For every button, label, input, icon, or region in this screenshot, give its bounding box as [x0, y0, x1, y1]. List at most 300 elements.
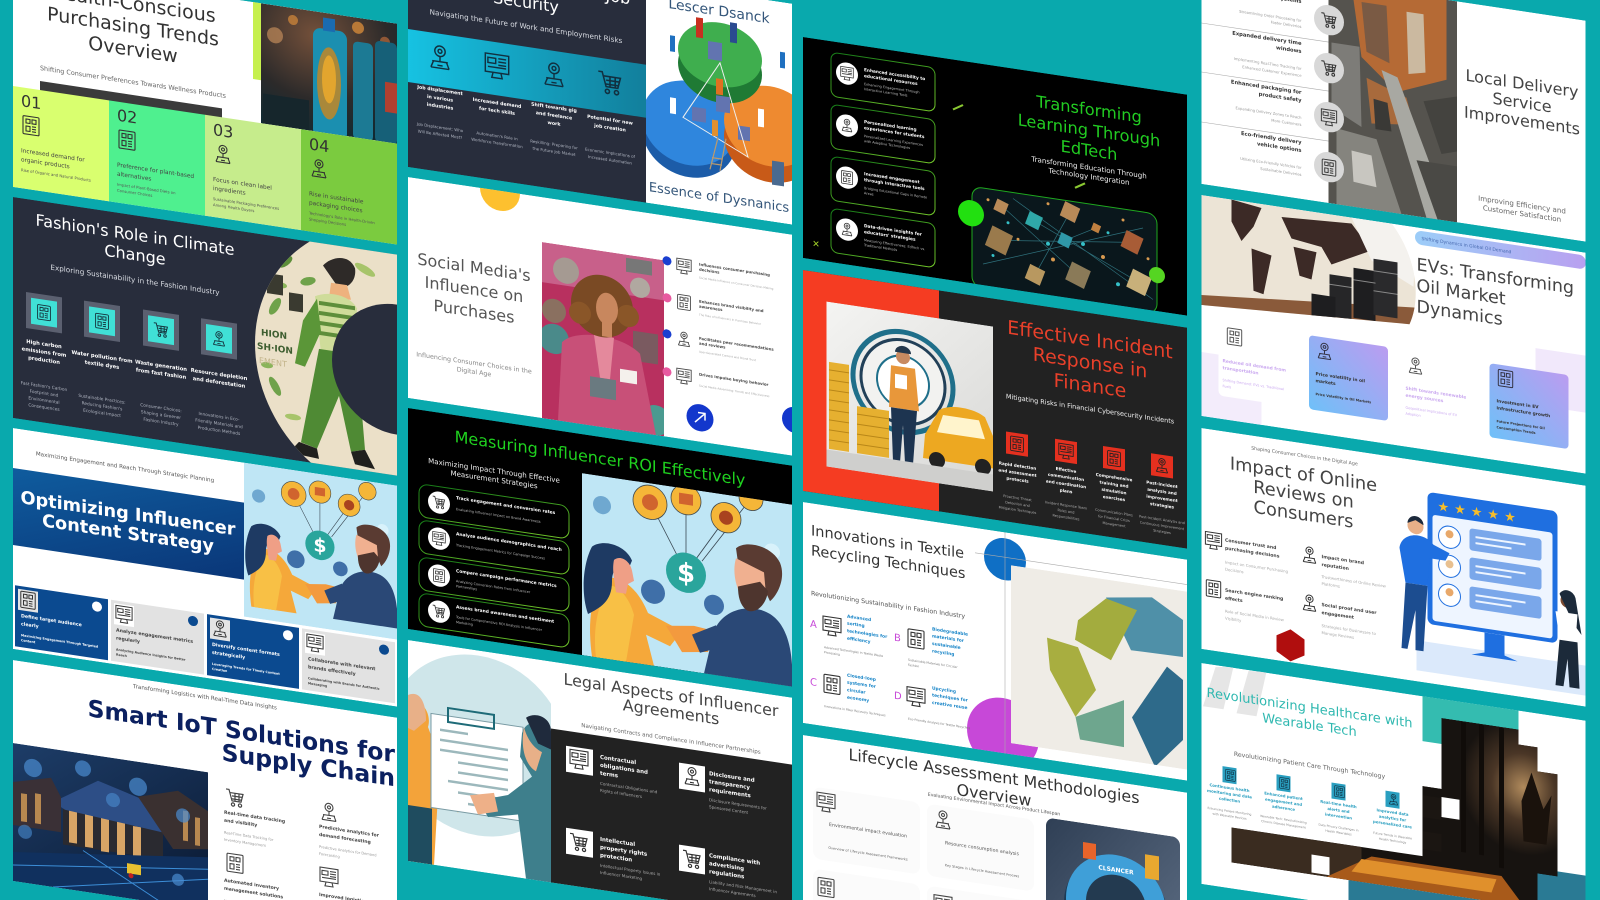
item 2: Forecasting — [319, 852, 340, 859]
item 2: plans — [1060, 488, 1073, 494]
row 2 — [419, 520, 569, 575]
item 1: terms — [600, 771, 619, 780]
item 3: property rights — [600, 845, 648, 858]
item 1 — [566, 746, 658, 801]
row 1: educational resources — [864, 73, 918, 87]
card 02: Consumer Choices — [117, 188, 152, 198]
item 1: Contractual — [600, 755, 636, 766]
item B: B — [894, 633, 901, 645]
card 04 — [301, 129, 397, 245]
card 04: Rise in sustainable — [309, 191, 364, 206]
quote marks — [1203, 662, 1266, 718]
row 1: Enhanced accessibility to — [864, 67, 925, 82]
card 1: transportation — [1222, 365, 1259, 377]
title banner: Optimizing Influencer — [20, 487, 236, 540]
row 1 — [419, 484, 569, 539]
item 1: with Wearable Devices — [1212, 812, 1247, 821]
card 1: Fuels — [1222, 384, 1231, 389]
row 3: Analyzing Conversion Rates from Influencer — [456, 579, 531, 594]
row 4 — [419, 593, 569, 648]
item 4: analysis and — [1147, 487, 1177, 496]
item C: Closed-loop — [847, 673, 876, 683]
item 2: adherence — [1272, 804, 1295, 812]
item 4: regulations — [709, 869, 745, 881]
card 4: Collaborating with Brands for Authentic — [308, 676, 380, 691]
icon band — [408, 29, 646, 118]
title: EdTech — [1061, 137, 1117, 164]
title: Change — [104, 241, 166, 269]
title: Local Delivery — [1466, 66, 1579, 102]
pill label — [1415, 230, 1586, 270]
item 1: purchasing decisions — [1225, 546, 1280, 560]
item 3 — [530, 101, 578, 158]
row 2: Analyze audience demographics and reach — [456, 531, 562, 553]
icon circle 3 — [1314, 100, 1344, 134]
item 3: protection — [600, 853, 632, 864]
subtitle: Customer Satisfaction — [1483, 203, 1561, 224]
item 2: transparency — [709, 779, 750, 791]
item B: Fashion — [908, 663, 919, 668]
title: Overview — [88, 31, 178, 68]
item 3: alerts and — [1327, 806, 1350, 814]
item 1: Consumer trust and — [1225, 538, 1276, 551]
item 2: Predictive analytics for — [319, 824, 380, 839]
icon circle 2 — [1314, 51, 1344, 85]
panel: EVs Transforming Oil Market slide — [1202, 195, 1586, 474]
title: Service — [1492, 89, 1552, 117]
item 1: Rapid detection — [999, 460, 1036, 471]
card 03: Focus on clean label — [213, 177, 272, 192]
decorative blue circle — [984, 535, 1026, 583]
illustration: fashion circle: EMENT — [259, 356, 287, 369]
card 4: brands effectively — [308, 664, 356, 677]
item 1: protocols — [1006, 476, 1029, 484]
panel: Smart IoT Solutions slide — [13, 660, 397, 900]
item 3: Management — [1103, 521, 1126, 528]
row 2 text — [1232, 31, 1302, 78]
item 3 — [1206, 580, 1285, 629]
item A: Advanced Technologies in Textile Waste — [824, 645, 883, 658]
title: Impact of Online — [1230, 453, 1377, 496]
item 1: Enhancing Patient Monitoring — [1208, 806, 1252, 816]
list item 3 — [662, 329, 774, 365]
item 1 — [1207, 764, 1252, 822]
image: city aerial — [1328, 0, 1458, 222]
list item 3: User-Generated Content and Brand Trust — [699, 350, 757, 362]
row 1 text: Streamlining Order Processing for — [1239, 10, 1302, 23]
item text 1: Fast Fashion's Carbon — [21, 380, 67, 393]
item 3: Influencer Marketing — [600, 870, 643, 881]
item 2: Enhanced patient — [1264, 790, 1303, 801]
item 2: Responsibilities — [1053, 513, 1080, 521]
item 4: strategies — [1150, 501, 1175, 510]
subtitle: Transforming Education Through — [1030, 154, 1147, 181]
item 4: Strategies — [1153, 529, 1171, 535]
item 2: Increased demand — [473, 97, 521, 110]
row 3 text: More Customers — [1271, 118, 1302, 127]
small green circle — [1149, 266, 1165, 284]
row 2: Personalized Learning Experiences — [864, 134, 923, 147]
row 2: Personalized learning — [864, 119, 917, 133]
item 3: and freelance — [536, 110, 572, 122]
row 1: Evaluating Influencer Impact on Brand Awareness — [456, 507, 541, 524]
item text 2: textile dyes — [85, 360, 119, 371]
item 3 — [1319, 781, 1359, 838]
image: lifecycle ring — [1046, 817, 1180, 900]
subtitle: Maximizing Engagement and Reach Through Strategic Planning — [36, 451, 215, 484]
item text 1: Footprint and — [30, 389, 59, 399]
item 2: engagement and — [1265, 797, 1302, 807]
item 2: Sponsored Content — [709, 804, 749, 815]
title: Measuring Influencer ROI Effectively — [455, 427, 746, 490]
card 1: Content — [21, 638, 36, 644]
item 1: Proactive Threat — [1003, 494, 1032, 502]
list item 1: decisions — [699, 267, 720, 275]
item 1: Decisions — [1225, 567, 1244, 574]
item A: Processing — [824, 650, 840, 657]
card 3: Diversify content formats — [212, 642, 280, 658]
item 1: Real-time data tracking — [224, 810, 285, 825]
item D: Upcycling — [932, 685, 956, 695]
item C: systems for — [847, 680, 877, 690]
item 1: collection — [1219, 796, 1240, 804]
item 4 — [679, 845, 777, 900]
item 4: Economic Implications of — [585, 147, 636, 159]
subtitle: Navigating the Future of Work and Employment Risks — [430, 7, 623, 45]
item 3: effects — [1225, 596, 1243, 604]
row 3 text — [1231, 79, 1302, 127]
subtitle: Technology Integration — [1048, 166, 1129, 187]
card 01: 01 — [21, 91, 41, 113]
item text 2 — [71, 350, 133, 421]
item 4: analytics for — [1379, 814, 1406, 823]
item 4: Post-incident — [1146, 480, 1178, 489]
panel: Optimizing Influencer Content Strategy slide — [13, 428, 397, 707]
item 4: Liability and Risk Management in — [709, 879, 777, 894]
item 3: Automated inventory — [224, 878, 279, 892]
item 1: industries — [427, 102, 453, 112]
panel: Job Security slide — [408, 0, 816, 228]
item 2: Platforms — [1322, 581, 1340, 589]
card 3: strategically — [212, 650, 245, 661]
card 4: Collaborate with relevant — [308, 656, 376, 672]
title: Dynamics — [1416, 297, 1503, 330]
title: Recycling Techniques — [811, 542, 965, 582]
panel: Measuring Influencer ROI slide — [408, 408, 792, 687]
card 04: Technology's Role in Health-Driven — [308, 210, 375, 225]
illustration: fashion circle — [255, 242, 397, 476]
card 03: Sustainable Packaging Preferences — [213, 196, 279, 211]
list item 1: Influences consumer purchasing — [699, 262, 770, 277]
decorative yellow circle — [480, 168, 520, 214]
item 4 — [319, 866, 364, 900]
subtitle: Exploring Sustainability in the Fashion Industry — [50, 263, 220, 297]
item text 3: Waste generation — [135, 359, 187, 373]
right panel: pie illustration: Essence of Dysnanics — [649, 180, 789, 216]
row 4: Traditional Methods — [863, 243, 897, 252]
card 1: Shifting Demand: EVs vs. Traditional — [1222, 378, 1284, 391]
title: Revolutionizing Healthcare with — [1207, 686, 1412, 732]
row 2 text: Implementing Real-Time Tracking for — [1234, 57, 1302, 71]
item 4: Post-Incident Analysis and — [1139, 514, 1185, 525]
image: lifecycle ring: CLSANCER — [1098, 864, 1134, 877]
item 4: Increased Automation — [588, 154, 632, 166]
item 4: Potential for new — [587, 114, 634, 127]
card 1: Overview of Lifecycle Assessment Frameworks — [828, 846, 908, 862]
item 4 — [1139, 451, 1185, 537]
arrow button — [686, 402, 714, 433]
list item 3: Facilitates peer recommendations — [699, 336, 774, 352]
item 1: Contractual Obligations and — [600, 781, 658, 794]
icon card 2 — [84, 301, 120, 342]
row 3: Compare campaign performance metrics — [456, 568, 557, 589]
row 2 text: Expanded delivery time — [1232, 31, 1302, 47]
item 3: training and — [1099, 479, 1129, 489]
item 4: engagement — [1322, 610, 1355, 621]
item B: Biodegradable — [932, 626, 968, 638]
item 1: Job displacement — [416, 84, 463, 97]
row 4 text: Utilizing Eco-Friendly Vehicles for — [1240, 157, 1302, 170]
image: fabric recycling arrows — [1011, 565, 1187, 772]
dark panel — [551, 728, 792, 900]
item 4: improvement — [1146, 494, 1178, 503]
title: Innovations in Textile — [811, 522, 964, 562]
card 01: Rise of Organic and Natural Products — [21, 167, 91, 183]
item B: Sustainable Materials for Circular — [908, 658, 958, 669]
item 3: Real-time health — [1320, 799, 1357, 809]
card 04: 04 — [309, 134, 329, 156]
card 3: Geopolitical Implications of EV — [1406, 406, 1458, 417]
illustration: online review monitor: ★★★★★ — [1438, 499, 1521, 527]
panel: Fashion's Role in Climate Change slide — [13, 197, 397, 476]
row 3: Areas — [864, 191, 874, 197]
row 3 — [419, 557, 569, 612]
card 1 — [15, 585, 108, 660]
item text 1: emissions from — [22, 346, 67, 359]
row 1 — [831, 52, 935, 112]
item 3: Intellectual — [600, 837, 635, 848]
card 1: clearly — [21, 621, 39, 630]
row 4: Tools for Comprehensive ROI Analysis in Influencer — [455, 615, 543, 632]
card 1 — [1218, 326, 1302, 408]
card 2: Price volatility in oil — [1316, 371, 1366, 385]
panel: Lifecycle Assessment Methodologies slide — [803, 735, 1187, 900]
title: Effective Incident — [1007, 316, 1173, 364]
card 03 — [205, 115, 301, 230]
card 2: regularly — [116, 635, 140, 645]
item text 2: Water pollution from — [71, 350, 133, 365]
title: Transforming — [1035, 92, 1142, 127]
row 4: Data-driven insights for — [864, 223, 923, 238]
row 4: educators' strategies — [864, 229, 916, 243]
item 2: Disclosure and — [709, 771, 755, 784]
subtitle: Revolutionizing Patient Care Through Technology — [1234, 751, 1385, 781]
item 1: Will Be Affected Most? — [418, 128, 462, 140]
image: smart warehouse — [13, 743, 208, 900]
item D: creative reuse — [932, 700, 967, 711]
card 02: 02 — [117, 106, 137, 128]
title: Lifecycle Assessment Methodologies — [849, 745, 1139, 807]
item 3: the Future Job Market — [533, 146, 576, 157]
subtitle: Measurement Strategies — [450, 468, 538, 490]
title: Supply Chain — [222, 738, 395, 792]
list item 2 — [662, 292, 764, 326]
row 4 text: vehicle options — [1257, 141, 1302, 154]
item 1 — [998, 430, 1037, 515]
card 03: 03 — [213, 120, 233, 142]
card 2: Resource consumption analysis — [945, 840, 1019, 857]
row 4 — [831, 208, 935, 268]
item C: circular — [847, 687, 866, 696]
list item 3: and reviews — [699, 341, 726, 350]
item 4 — [585, 114, 636, 166]
card 2: Key Stages in Lifecycle Assessment Process — [945, 863, 1019, 878]
item 4: advertising — [709, 861, 744, 872]
item 4: Social proof and user — [1322, 602, 1377, 616]
card 4 — [1490, 363, 1568, 449]
row 2 text: Enhanced Customer Experience — [1242, 65, 1302, 78]
card 01 — [13, 86, 109, 201]
item 1: and visibility — [224, 818, 257, 829]
list item 1: Social Media Influence on Consumer Decision-Making — [699, 276, 774, 291]
title: Improvements — [1464, 102, 1580, 139]
title: Reviews on — [1253, 477, 1354, 513]
icon circle 4 — [1314, 150, 1344, 184]
subtitle: Evaluating Environmental Impact Across Product Lifespan — [928, 792, 1060, 818]
icon card 4 — [201, 318, 237, 360]
item 4 — [1303, 594, 1377, 643]
item 2: and coordination — [1046, 478, 1086, 489]
card 2 — [111, 600, 204, 675]
item B: materials for — [932, 633, 965, 644]
item 3: intervention — [1325, 812, 1352, 821]
row 1 text — [1231, 0, 1302, 29]
card 2: Reach — [116, 652, 128, 658]
item text 4: Friendly Materials and — [195, 417, 243, 430]
item 3: Intellectual Property Issues in — [600, 863, 661, 877]
item 4: Strategies for Businesses to — [1322, 623, 1376, 636]
card 1: Define target audience — [21, 613, 82, 628]
card 3 — [207, 614, 299, 689]
row 3 text: Enhanced packaging for — [1231, 79, 1302, 96]
subtitle: Influencing Consumer Choices in the — [416, 351, 532, 376]
item 2: requirements — [709, 787, 752, 800]
card 01: Increased demand for — [21, 148, 85, 164]
subtitle: Navigating Contracts and Compliance in Influencer Partnerships — [581, 723, 761, 756]
item 2 — [319, 802, 379, 858]
item 2: Roles and — [1058, 508, 1074, 515]
item C: Innovations in Fiber Recovery Techniques — [824, 704, 886, 717]
icon circle 1 — [1314, 3, 1344, 37]
item 4: Manage Reviews — [1322, 630, 1354, 640]
decorative purple circle — [967, 693, 1039, 775]
second arrow button — [782, 405, 808, 435]
subtitle: Improving Efficiency and — [1478, 194, 1566, 216]
title: Consumers — [1254, 497, 1353, 533]
illustration: fashion circle: SH·ION — [257, 342, 293, 357]
item 2: Predictive Analytics for Demand — [319, 845, 377, 858]
item B: sustainable — [932, 641, 961, 651]
title: Social Media's — [417, 249, 531, 285]
item 3: simulation — [1102, 487, 1126, 496]
item text 2: Sustainable Practices: — [78, 393, 126, 406]
subtitle: Maximizing Impact Through Effective — [428, 456, 560, 485]
item text 1 — [21, 338, 67, 414]
card 4: Future Projections for Oil — [1496, 419, 1545, 430]
item D: Eco-Friendly Analysis for Textile Recycling — [908, 717, 970, 730]
item text 4: Innovations in Eco- — [199, 411, 240, 423]
card 2 — [927, 804, 1034, 892]
item 3: Shift towards gig — [531, 101, 577, 114]
item 2 — [679, 763, 767, 818]
item 2: Disclosure Requirements for — [709, 797, 767, 811]
title: Overview — [957, 780, 1031, 810]
card 02: Impact of Plant-Based Diets on — [117, 182, 176, 195]
title: Learning Through — [1018, 110, 1160, 151]
card 1 — [813, 786, 920, 875]
item text 1: High carbon — [26, 339, 62, 350]
item text 1: Consequences — [28, 402, 60, 413]
card 3 — [813, 868, 920, 900]
illustration: contract handshake — [388, 642, 568, 885]
item 1 — [416, 84, 464, 140]
subtitle: Revolutionizing Sustainability in Fashion Industry — [811, 590, 965, 620]
illustration: online review monitor — [1400, 488, 1586, 696]
row 4: Marketing — [456, 620, 473, 627]
row 3: through interactive tools — [864, 177, 925, 192]
card 03: Among Health Buyers — [213, 202, 254, 213]
item D: techniques for — [932, 692, 969, 704]
subtitle: Transforming Logistics with Real-Time Data Insights — [132, 684, 277, 712]
item 2: Workforce Transformation — [471, 137, 523, 149]
image: influencer portrait — [539, 242, 671, 437]
item 1: Detection and — [1005, 500, 1030, 508]
item 1: Continuous health — [1209, 782, 1250, 793]
pill label: Shifting Dynamics in Global Oil Demand — [1422, 236, 1512, 255]
item 1: monitoring and data — [1207, 788, 1252, 800]
item 4: Compliance with — [709, 853, 760, 867]
item A: technologies for — [847, 628, 888, 640]
item 3: Reskilling: Preparing for — [530, 138, 578, 151]
card 3: Adoption — [1406, 412, 1421, 418]
item 2: Wearable Tech: Revolutionizing — [1260, 814, 1307, 825]
item 1: Job Displacement: Who — [416, 121, 464, 133]
item 3 — [224, 853, 283, 900]
row 1: Interactive Learning Tools — [864, 87, 908, 98]
list item 4: Drives impulse buying behavior — [699, 372, 768, 387]
title: Smart IoT Solutions for — [88, 694, 395, 768]
image: dark stepped photo — [1232, 686, 1562, 900]
item 2 — [471, 97, 523, 149]
title banner — [13, 468, 244, 580]
card 2: Analyzing Audience Insights for Better — [116, 647, 186, 662]
title: Influence on — [425, 273, 523, 306]
right panel: pie illustration — [642, 0, 816, 228]
item 3: Visibility — [1225, 616, 1242, 623]
row 1: Track engagement and conversion rates — [456, 495, 556, 516]
panel: Innovations in Textile Recycling slide — [803, 502, 1187, 798]
panel: Social Media's Influence slide — [408, 157, 808, 458]
title banner: Content Strategy — [42, 510, 214, 557]
item 1: Inventory Management — [224, 838, 267, 848]
image: oil barrels and map — [1202, 195, 1422, 343]
row 3 text: Expanding Delivery Zones to Reach — [1236, 106, 1302, 120]
item 3 — [566, 828, 661, 884]
green circle — [958, 198, 984, 228]
row 4 text: Eco-friendly delivery — [1241, 131, 1302, 146]
item C: C — [810, 677, 817, 689]
card 4 — [302, 628, 395, 703]
